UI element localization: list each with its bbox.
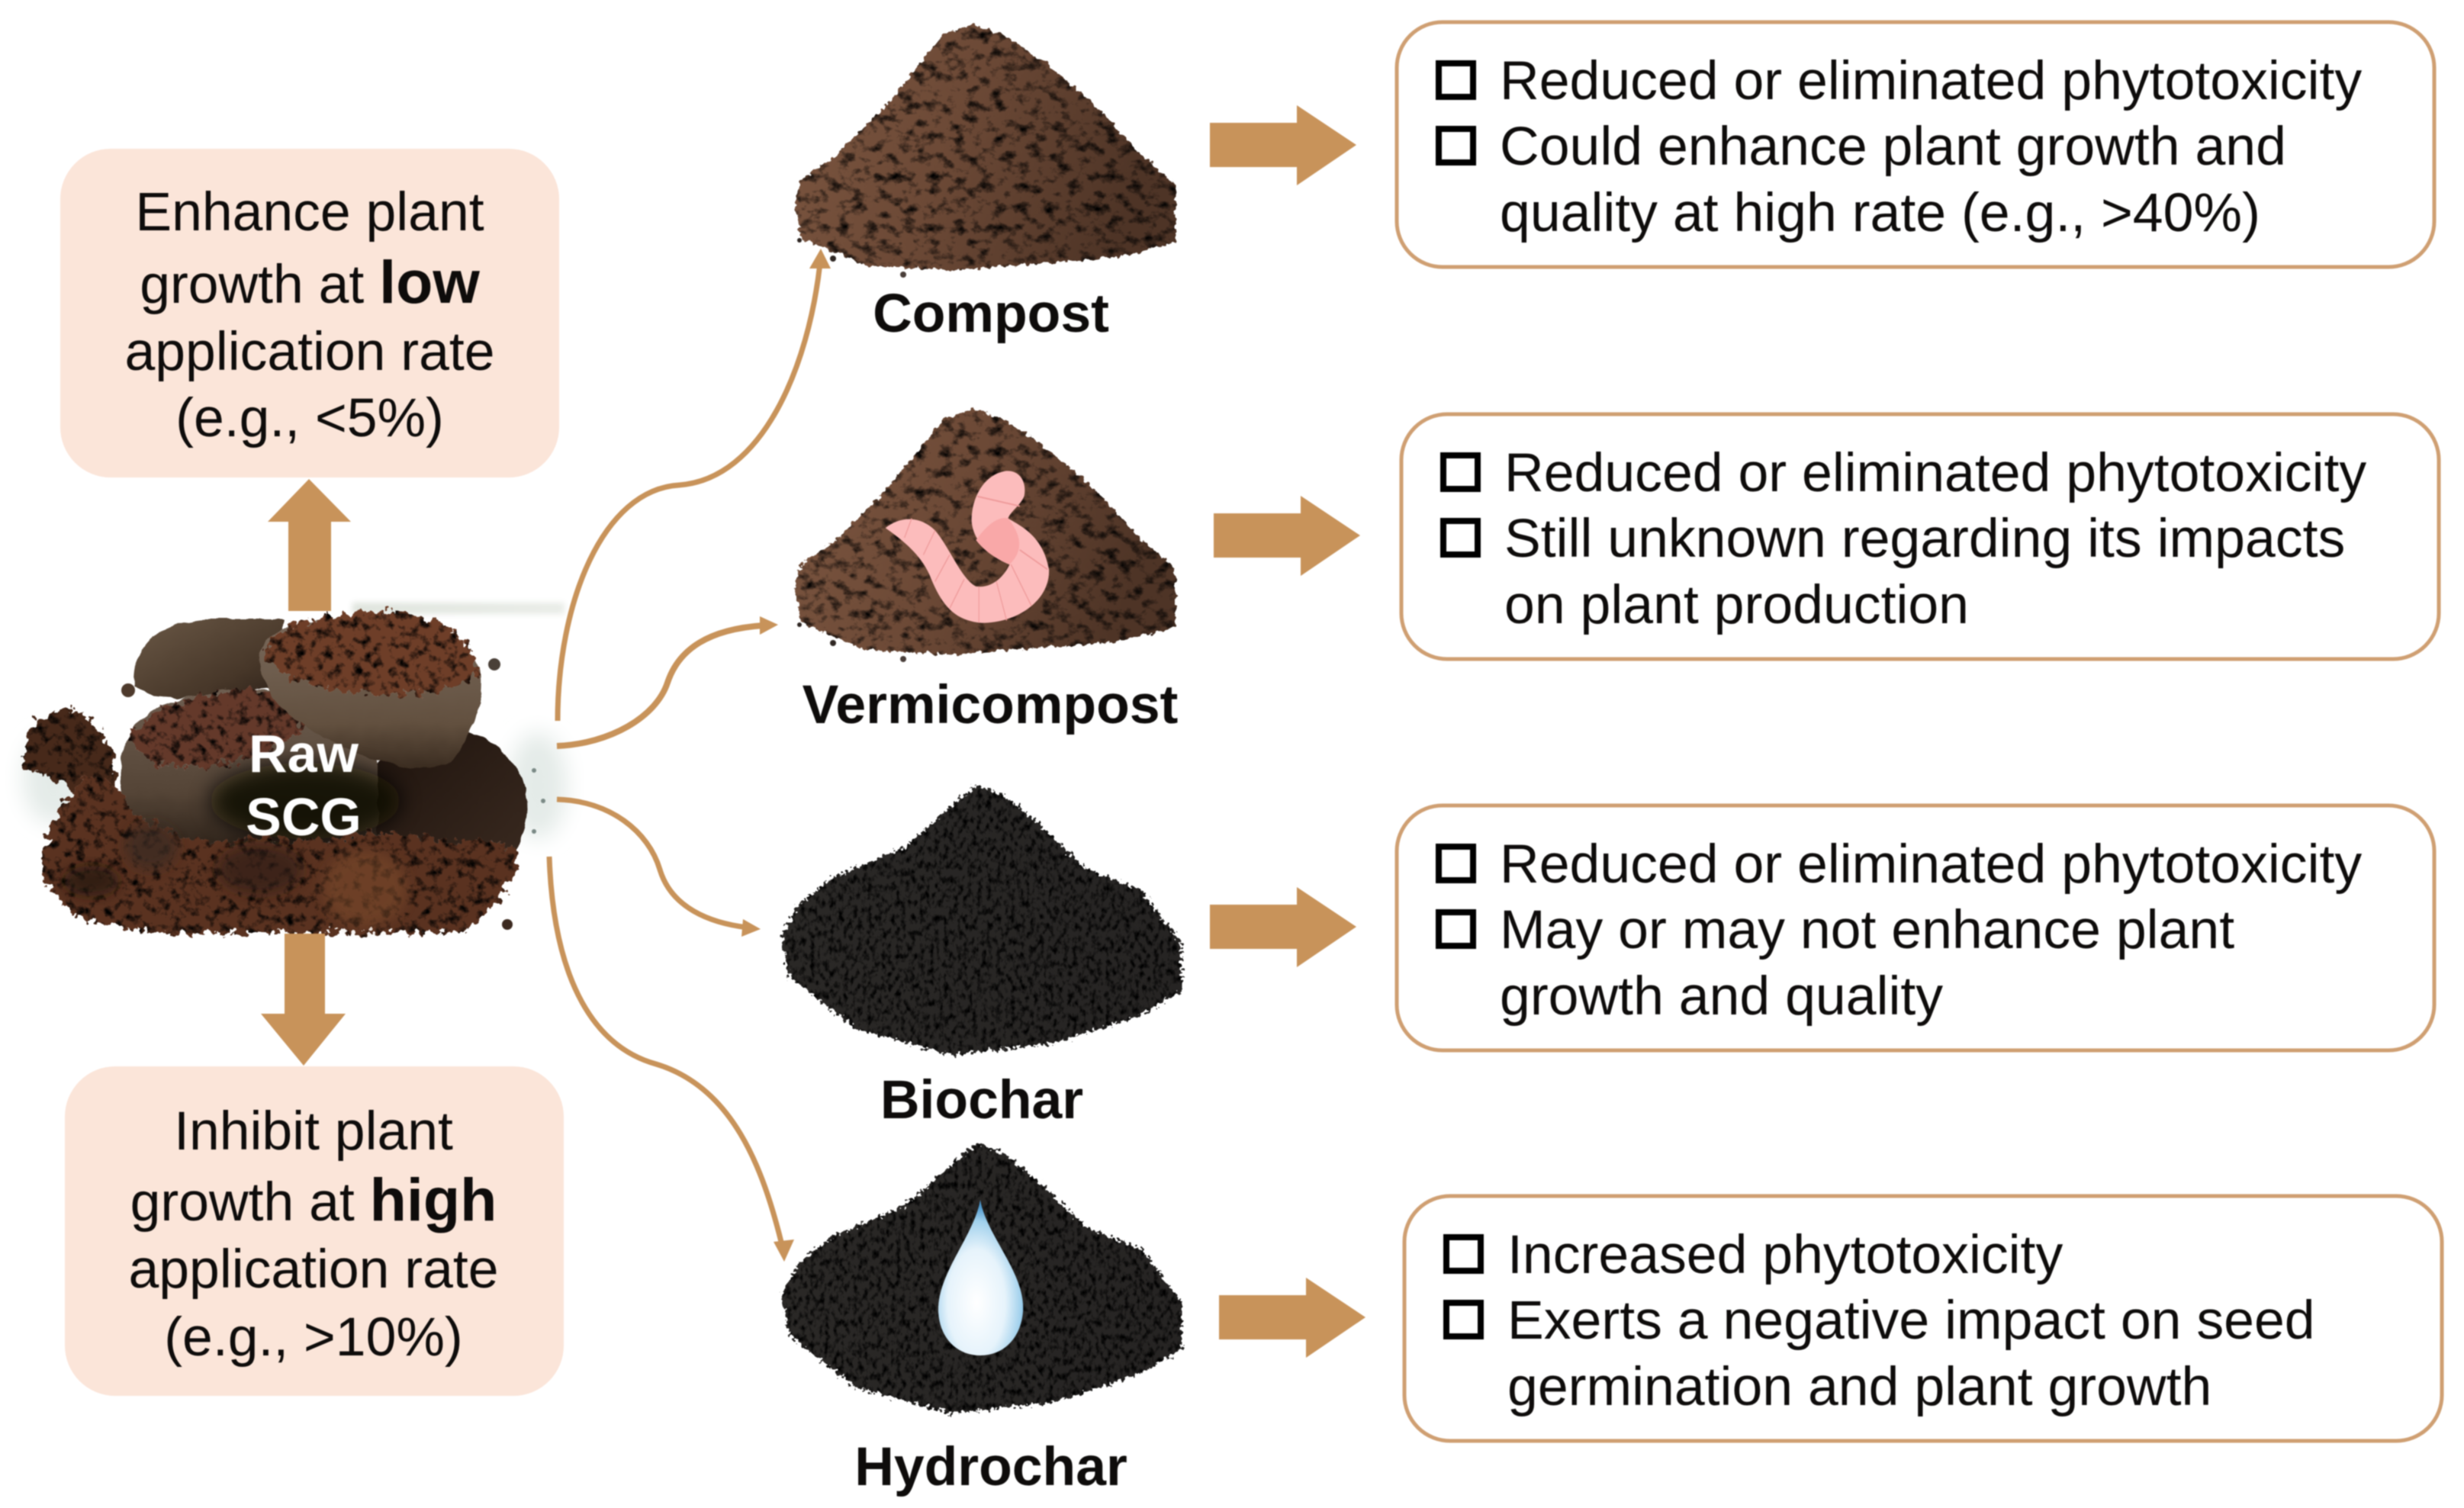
icon: checkbox	[1443, 455, 1478, 489]
arrow: compost to outcome	[1210, 105, 1356, 185]
panel: inhibit plant growth at high application rate	[65, 1066, 564, 1396]
label: Biochar: Biochar	[880, 1069, 1083, 1130]
panel: inhibit plant growth at high application rate: Inhibit plant	[174, 1101, 453, 1162]
icon: water drop	[938, 1200, 1023, 1355]
image: compost pile	[795, 24, 1176, 278]
image: raw SCG pile	[21, 603, 567, 934]
label: Compost: Compost	[873, 283, 1109, 344]
icon: pink worm	[886, 471, 1049, 623]
image: biochar pile	[782, 784, 1182, 1055]
panel: vermicompost outcomes	[1401, 414, 2439, 659]
arrow: vermicompost to outcome	[1214, 496, 1360, 576]
arrow: up from raw SCG to enhance panel	[268, 479, 351, 611]
text: compost outcomes: Reduced or eliminated phytotoxicity	[1500, 50, 2362, 111]
panel: enhance plant growth at low application rate: (e.g., <5%)	[175, 387, 444, 449]
label: Hydrochar: Hydrochar	[854, 1436, 1127, 1497]
text: compost outcomes: quality at high rate (e.g., >40%)	[1500, 182, 2260, 243]
icon: checkbox	[1439, 129, 1473, 162]
text: biochar outcomes: May or may not enhance plant	[1500, 899, 2234, 960]
panel: enhance plant growth at low application rate: Enhance plant	[135, 182, 484, 243]
label: Raw SCG: SCG	[246, 787, 362, 847]
text: hydrochar outcomes: Increased phytotoxicity	[1507, 1224, 2063, 1285]
panel: compost outcomes	[1397, 22, 2434, 267]
panel: enhance plant growth at low application rate: growth at low	[140, 248, 480, 316]
icon: checkbox	[1439, 847, 1473, 880]
text: biochar outcomes: growth and quality	[1500, 966, 1943, 1027]
arrow: raw SCG to vermicompost	[557, 616, 778, 746]
icon: checkbox	[1443, 521, 1478, 555]
text: vermicompost outcomes: Reduced or eliminated phytotoxicity	[1504, 442, 2366, 503]
image: hydrochar pile with water drop	[782, 1143, 1182, 1413]
panel: inhibit plant growth at high application rate: (e.g., >10%)	[164, 1307, 463, 1368]
arrow: raw SCG to compost	[558, 249, 831, 721]
icon: checkbox	[1446, 1303, 1481, 1336]
panel: enhance plant growth at low application rate	[60, 149, 559, 477]
icon: checkbox	[1439, 912, 1473, 946]
arrow: hydrochar to outcome	[1219, 1278, 1365, 1358]
arrow: down from raw SCG to inhibit panel	[261, 934, 346, 1066]
arrow: raw SCG to hydrochar	[549, 857, 794, 1262]
panel: hydrochar outcomes	[1404, 1196, 2442, 1441]
label: Raw SCG: Raw	[249, 724, 359, 783]
arrow: raw SCG to biochar	[557, 799, 761, 937]
text: vermicompost outcomes: on plant production	[1504, 574, 1969, 635]
arrow: biochar to outcome	[1210, 887, 1356, 967]
text: hydrochar outcomes: germination and plant growth	[1507, 1356, 2211, 1417]
icon: checkbox	[1446, 1237, 1481, 1271]
image: vermicompost pile with worm	[795, 409, 1176, 662]
panel: enhance plant growth at low application rate: application rate	[125, 321, 494, 382]
panel: inhibit plant growth at high application rate: growth at high	[130, 1166, 497, 1233]
text: compost outcomes: Could enhance plant growth and	[1500, 116, 2286, 177]
icon: checkbox	[1439, 63, 1473, 97]
label: Vermicompost: Vermicompost	[803, 674, 1178, 735]
text: biochar outcomes: Reduced or eliminated phytotoxicity	[1500, 834, 2362, 895]
panel: inhibit plant growth at high application rate: application rate	[129, 1239, 498, 1300]
text: hydrochar outcomes: Exerts a negative impact on seed	[1507, 1290, 2315, 1351]
decorative lumps inside the powder	[125, 824, 177, 870]
panel: biochar outcomes	[1397, 805, 2434, 1050]
text: vermicompost outcomes: Still unknown regarding its impacts	[1504, 508, 2345, 569]
